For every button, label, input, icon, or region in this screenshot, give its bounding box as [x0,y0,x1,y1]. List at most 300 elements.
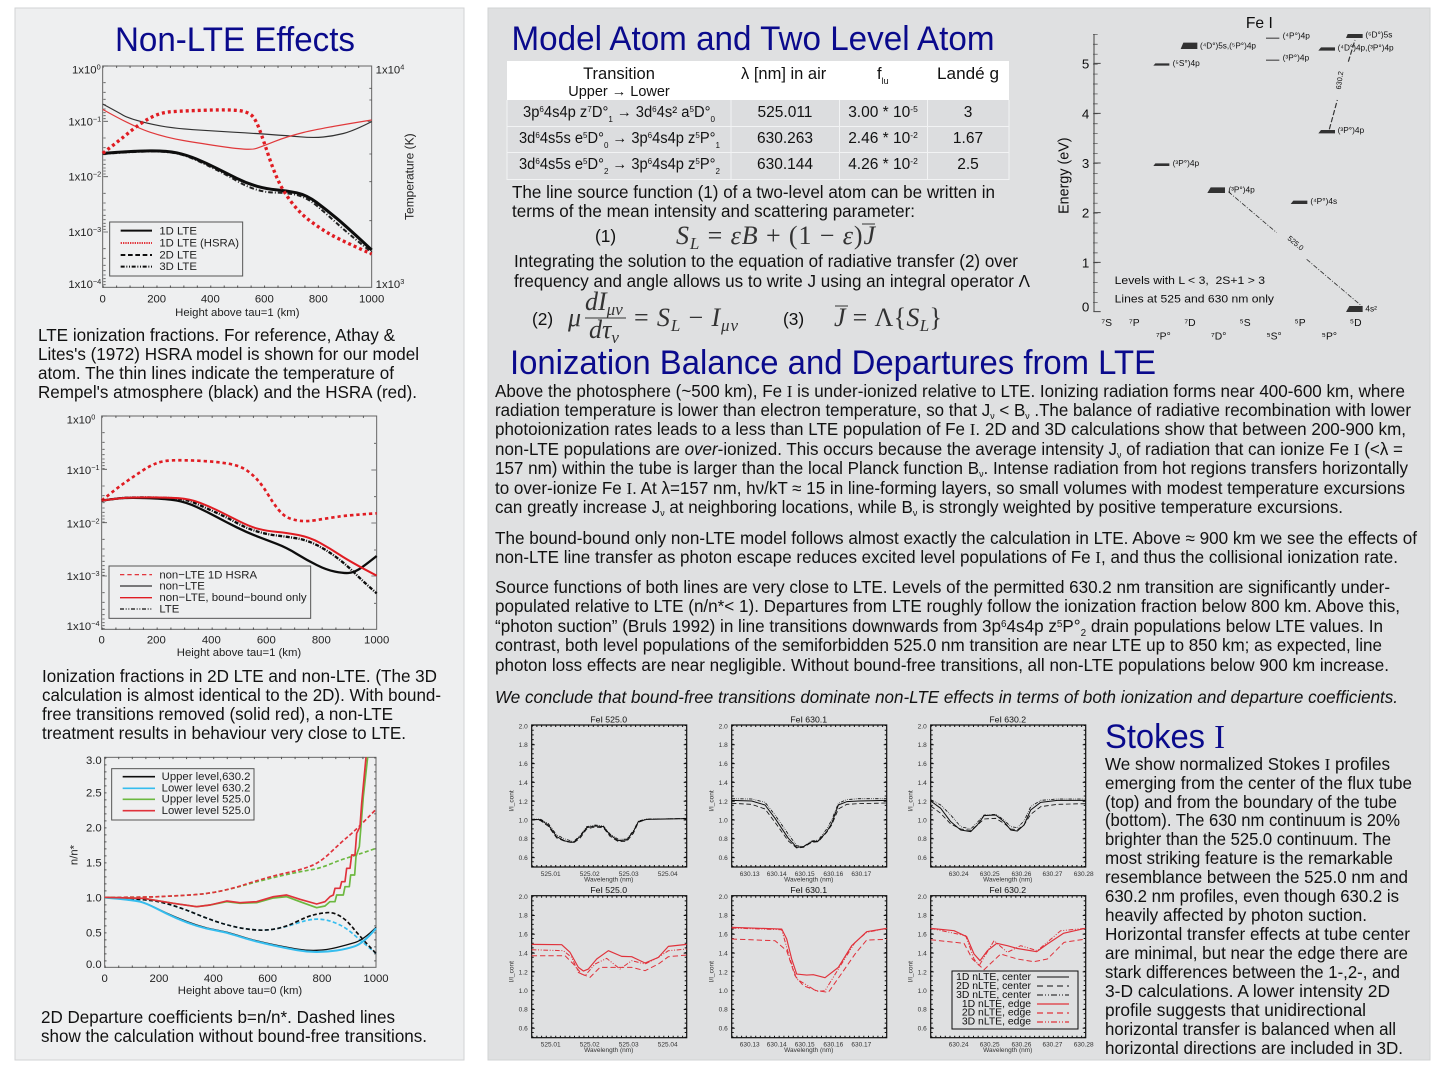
plot: Fe I 630.1 edge: 0.8 [719,1007,728,1014]
plot: Fe I 630.2 center: Wavelength (nm) [983,876,1032,884]
text: under-ionization paragraph: Above the photosphere (~500 km), Fe I is under-ionized relative to LTE. Ionizing radiation forms near 400-600 km, where [495,381,1405,401]
plot: Fe I 630.1 center: 630.16 [823,871,844,878]
plot: Fe I 630.1 edge: 1.4 [719,951,728,958]
text: bound-bound paragraph: non-LTE line transfer as photon escape reduces excited level populations of Fe I, and thus the collisional ionization rate. [495,547,1398,567]
y axis labels: −4 [91,619,100,628]
legend: Stokes line styles: 2D nLTE, center [956,981,1032,992]
plot: Fe I 525.0 edge: 1.2 [519,970,528,977]
panel: model atom, ionization balance and Stokes I [488,8,1430,1060]
y axis labels: 1.5 [86,858,102,870]
note: levels selection [1115,275,1274,305]
x axis labels: 400 [204,973,223,985]
x axis labels: 600 [257,635,276,647]
left axis labels: 0 [97,62,101,71]
x axis labels: 200 [147,294,166,306]
text: Stokes I description: are minimal, but near the edge there are [1105,943,1408,963]
x axis labels: 800 [309,294,328,306]
y axis labels: 3.0 [86,755,102,767]
caption: departure coefficients: 2D Departure coefficients b=n/n*. Dashed lines [41,1007,395,1027]
row 630.263: -2 [910,130,918,140]
text: bound-bound paragraph: The bound-bound only non-LTE model follows almost exactly the calculation in LTE. Above ≈ 900 km we see the effects of [495,528,1417,548]
plot: Fe I 525.0 center: I/I_cont [509,790,516,812]
right axis labels: 1x10 [376,64,400,76]
text: under-ionization paragraph: < B [995,400,1025,420]
plot: Fe I 630.1 edge: Wavelength (nm) [784,1047,833,1054]
row 525.011 [523,104,972,124]
heading: Ionization Balance: Ionization Balance and Departures from LTE [510,344,1156,382]
equation 3: (3) [783,309,804,329]
term labels: ⁵D [1350,318,1362,329]
equation 1: S [676,221,689,250]
plot: Fe I 630.1 center: 1.8 [719,742,728,749]
title: Non-LTE Effects: Non-LTE Effects [115,21,355,59]
level labels: 525.0 [1286,234,1306,252]
x axis labels: Height above tau=1 (km) [175,307,300,319]
plot: Fe I 630.2 edge: 1.8 [918,913,927,920]
y axis labels: 1x10 [67,518,91,530]
plot: Fe I 525.0 edge: 2.0 [519,894,528,901]
row 630.263: → 3p [608,130,648,147]
plot: Fe I 630.1 edge: 2.0 [719,894,728,901]
chart: LTE ionization fractions [68,62,416,319]
text: under-ionization paragraph: ν [990,411,995,421]
plot: Fe I 525.0 edge: 0.6 [519,1026,528,1033]
plot: Fe I 630.2 center: 0.8 [918,836,927,843]
y axis labels: 0 [91,412,95,421]
legend: Stokes line styles: 3D nLTE, center [956,990,1032,1001]
right axis labels: 4 [400,62,404,71]
plot: Fe I 525.0 edge: 525.03 [619,1042,639,1049]
axis labels: 1 [1082,255,1089,270]
plot: Fe I 525.0 edge: 525.02 [580,1042,600,1049]
row 630.263: 2.46 * 10 [848,130,910,147]
plot: Fe I 525.0 center: 1.2 [519,799,528,806]
plot: Fe I 630.2 edge: 1.6 [918,932,927,939]
text: under-ionization paragraph: is strongly weighted by positive temperature excursions. [917,497,1343,517]
plot: Fe I 525.0 center: 1.0 [519,818,528,824]
plot: Fe I 525.0 center: 1.4 [519,780,528,787]
x axis labels: 600 [255,294,274,306]
equation 2: ν [611,328,619,347]
caption: ionization fractions: calculation is almost identical to the 2D). With bound- [42,685,441,705]
plot: Fe I 525.0 center: 2.0 [519,724,528,730]
x axis labels: 800 [313,973,331,985]
plot: Fe I 630.2 center: 630.24 [949,871,969,878]
plot: Fe I 630.1 edge: 1.8 [719,913,728,920]
text: under-ionization paragraph: ν [660,508,665,518]
text: Stokes I description [1105,754,1412,1058]
plot: Fe I 630.1 edge: 630.17 [851,1042,872,1049]
plot: Fe I 630.2 center: 630.27 [1042,871,1063,878]
text: under-ionization paragraph: ν [1025,411,1030,421]
text: source functions paragraph: 5 [1057,619,1063,630]
plot: Fe I 630.2 edge: 2.0 [918,894,927,901]
plot: Fe I 630.1 center: I/I_cont [709,790,716,812]
legend: Lower level 630.2 [162,783,250,795]
level labels: (³P°)4p [1173,158,1200,168]
text: Stokes I description: horizontal transfer is balanced when all [1105,1019,1396,1039]
plot: Fe I 630.2 center: 1.8 [918,742,927,749]
x axis labels: 600 [258,973,277,985]
table header [568,65,999,100]
row 525.011: 7 [587,104,592,114]
row 525.011: 1 [608,114,613,124]
equation 3 [783,303,942,335]
charts: Stokes I profiles [509,714,1094,1054]
transition lines [1228,40,1362,306]
caption: LTE ionization fractions [38,325,419,402]
text: under-ionization paragraph: ν [979,469,984,479]
level labels: (⁴D°)4p,(³P°)4p [1338,43,1394,53]
row 630.263: 3d [519,130,536,147]
legend: 1D LTE [159,225,197,237]
plot: Fe I 630.1 center: 630.17 [851,871,872,878]
x axis labels: Height above tau=1 (km) [177,647,301,659]
plot: Fe I 630.1 center: 630.14 [767,871,787,878]
chart: Fe I energy level diagram: Fe I [1246,15,1273,32]
text: two-level source function: The line source function (1) of a two-level atom can be written in [512,182,995,202]
caption: ionization fractions: Ionization fractions in 2D LTE and non-LTE. (The 3D [42,666,437,686]
left axis labels: −3 [93,225,101,234]
row 630.144: D° [588,156,604,173]
equation 2: dτ [589,315,611,344]
text: under-ionization paragraph: of radiation that can ionize Fe [1121,439,1354,459]
term labels [1101,318,1362,342]
heading: Stokes I: Stokes I [1105,718,1225,756]
plot: Fe I 525.0 edge: FeI 525.0 [590,885,627,895]
plot: Fe I 630.2 edge [908,885,1094,1054]
row 630.144: 5 [583,156,588,166]
term labels: ⁷D° [1211,331,1226,342]
caption: ionization fractions [42,666,441,743]
y axis labels: 1x10 [67,414,91,426]
text: integrating the solution: frequency and angle allows us to write J using an integral operator Λ [514,271,1030,291]
plot: Fe I 630.1 edge: 1.6 [719,932,728,939]
axis labels: 0 [1082,300,1089,315]
plot: Fe I 525.0 center: 525.02 [580,871,600,878]
row 630.144: -2 [910,156,918,166]
y axis labels: 1x10 [67,465,91,477]
left axis labels: 1x10 [68,116,93,128]
text: source functions paragraph: populated relative to LTE (n/n*< 1). Departures from LTE roughly follow the ionization fraction below 800 km. Above this, [495,596,1400,616]
plot: Fe I 630.2 edge: 1.4 [918,951,927,958]
axis labels [1057,56,1090,315]
equation 2: μ [567,303,581,332]
plot: Fe I 630.2 edge: FeI 630.2 [989,885,1026,895]
plot: Fe I 630.1 center: 1.6 [719,761,728,768]
x axis labels: 1000 [359,294,384,306]
level labels: (⁶D°)5s [1365,30,1392,40]
row 630.263: 6 [648,130,652,140]
axis labels: 3 [1082,156,1089,171]
x axis labels [100,294,384,319]
plot: Fe I 630.1 center [709,714,887,884]
plot: Fe I 525.0 edge: 1.8 [519,913,528,920]
row 630.263: 5 [583,130,588,140]
left axis labels: −1 [93,114,101,123]
legend: 3D LTE [159,261,197,273]
axis labels: 5 [1082,56,1089,71]
row 630.144 [519,156,979,176]
text: under-ionization paragraph [495,381,1411,518]
plot: Fe I 630.1 edge: 630.14 [767,1042,787,1049]
right axis labels: 1x10 [376,279,400,291]
x axis labels: Height above tau=0 (km) [178,985,302,997]
row 525.011: 525.011 [758,104,812,121]
legend: 2D LTE [159,249,197,261]
row 525.011: -5 [910,104,918,114]
plot: Fe I 630.1 center: FeI 630.1 [790,714,827,724]
row 630.144: 3d [519,156,536,173]
left axis labels: −2 [93,170,101,179]
text: Stokes I description: We show normalized Stokes I profiles [1105,754,1390,774]
plot: Fe I 630.1 edge: 630.15 [795,1042,815,1049]
plot: Fe I 630.2 edge: 1.0 [918,988,927,995]
level labels: (³P°)4p [1283,52,1310,62]
level labels: 4s² [1365,303,1377,313]
note: levels selection: Levels with L < 3, 2S+1 > 3 [1115,275,1265,287]
row 630.144: 6 [648,156,652,166]
y axis labels: 0.0 [86,959,102,971]
equation 2 [532,287,738,347]
y axis labels: 0.5 [86,928,102,940]
text: Stokes I description: profile suggests that unidirectional [1105,1000,1366,1020]
text: under-ionization paragraph: ν [1117,450,1122,460]
text: Stokes I description: horizontal directions are included in 3D. [1105,1038,1403,1058]
level labels [1173,30,1394,313]
plot: Fe I 630.2 center: 1.4 [918,780,927,787]
text: source functions paragraph: Source functions of both lines are very close to LTE. Levels of the permitted 630.2 nm transition are significantly under- [495,577,1390,597]
row 630.144: 2 [604,166,609,176]
term labels: ⁷S [1101,318,1112,329]
plot: Fe I 630.2 edge: Wavelength (nm) [983,1047,1032,1054]
table header: Upper → Lower [568,84,670,100]
left axis labels: −4 [93,277,101,286]
plot: Fe I 630.2 center: 0.6 [918,855,927,862]
plot: Fe I 630.2 edge: 0.6 [918,1026,927,1033]
plot: Fe I 630.1 edge: 1.0 [719,988,728,995]
equation 3: L [919,316,929,335]
axis labels: Energy (eV) [1057,137,1073,214]
equation 1: εB + (1 − ε)J [731,221,875,250]
text: under-ionization paragraph: ν [913,508,918,518]
text: source functions paragraph: 2 [1081,628,1087,639]
heading: Model Atom and Two Level Atom: Model Atom and Two Level Atom [512,20,994,58]
caption: ionization fractions: treatment results in behaviour very close to LTE. [42,723,406,743]
plot: Fe I 630.2 edge: 630.27 [1042,1042,1063,1049]
legend [112,769,254,820]
equation 1 [595,221,876,253]
text: under-ionization paragraph: . Intense radiation from hot regions transfers horizontally [984,458,1408,478]
row 630.263: 4s5s e [540,130,583,147]
right axis labels [376,62,416,291]
plot: Fe I 630.2 center: 2.0 [918,724,927,730]
plot: Fe I 630.1 center: 2.0 [719,724,728,730]
level labels: (³P°)4p [1228,185,1255,195]
text: source functions paragraph: drain populations below LTE values. In [1086,616,1383,636]
level labels: (⁴P°)4s [1310,196,1337,206]
row 525.011: D° [694,104,710,121]
plot: Fe I 630.1 center: Wavelength (nm) [784,876,833,884]
row 525.011: 3 [964,104,972,121]
y axis labels: 1.0 [86,893,102,905]
chart: Fe I energy level diagram [1057,15,1394,342]
term labels: ⁵P [1294,318,1306,329]
equation 1: (1) [595,226,616,246]
energy levels [1153,34,1363,312]
plot: Fe I 525.0 edge: 525.01 [541,1042,561,1049]
text: under-ionization paragraph: at neighboring locations, while B [665,497,913,517]
equation 1: = [700,221,730,250]
term labels: ⁵P° [1322,331,1337,342]
row 630.144: 4.26 * 10 [848,156,910,173]
text: Stokes I description: 3-D calculations. A lower intensity 2D [1105,981,1390,1001]
x axis labels: 400 [201,294,220,306]
legend: non−LTE, bound−bound only [159,592,307,604]
text: bound-bound paragraph [495,528,1417,567]
plot: Fe I 525.0 center: 0.6 [519,855,528,862]
note: levels selection: Lines at 525 and 630 nm only [1115,293,1274,305]
equation 2: − [681,303,711,332]
plot: Fe I 630.2 edge: 1.2 [918,970,927,977]
plot: Fe I 525.0 center: 1.8 [519,742,528,749]
plot: Fe I 525.0 edge: Wavelength (nm) [584,1047,633,1054]
text: under-ionization paragraph: radiation temperature is lower than electron temperature, so that J [495,400,1000,420]
plot: Fe I 630.2 center: 1.0 [918,818,927,824]
chart: ionization fractions 2D LTE and non-LTE [67,412,389,659]
equation 2: I [711,303,720,332]
text: two-level source function: terms of the mean intensity and scattering parameter: [512,201,915,221]
row 525.011: 0 [710,114,715,124]
equation 2: L [670,316,680,335]
caption: ionization fractions: free transitions removed (solid red), a non-LTE [42,704,393,724]
legend: Stokes line styles: 3D nLTE, edge [962,1016,1031,1028]
plot: Fe I 525.0 center: 525.04 [658,871,678,878]
x axis labels [99,635,389,659]
x axis labels: 0 [99,635,105,647]
text: Stokes I description: stark differences between the 1-,2-, and [1105,962,1400,982]
text: Stokes I description: most striking feature is the remarkable [1105,848,1393,868]
plot: Fe I 525.0 edge: 1.4 [519,951,528,958]
row 525.011: 5 [689,104,694,114]
text: Stokes I description: (top) and from the boundary of the tube [1105,792,1397,812]
text: under-ionization paragraph: 157 nm) within the tube is larger than the local Planck function B [495,458,987,478]
y axis labels [68,755,102,971]
plot: Fe I 630.1 edge: 1.2 [719,970,728,977]
row 630.144: 5 [695,156,700,166]
plot: Fe I 630.2 center: I/I_cont [908,790,915,812]
y axis labels: 2.5 [86,788,102,800]
legend: Stokes line styles: 1D nLTE, edge [962,999,1031,1010]
plot: Fe I 630.1 center: 1.2 [719,799,728,806]
table header: λ [nm] in air [741,65,827,83]
text: under-ionization paragraph: I (<λ = [1354,439,1404,459]
term labels: ⁵S° [1266,331,1282,342]
text: Stokes I description: 630.2 nm profiles, even though 630.2 is [1105,886,1399,906]
caption: LTE ionization fractions: Lites's (1972) HSRA model is shown for our model [38,344,419,364]
plot: Fe I 525.0 center: 0.8 [519,836,528,843]
legend [110,222,243,276]
plot: Fe I 630.1 edge [709,885,887,1054]
equation 2: μν [720,316,738,335]
x axis labels: 800 [312,635,331,647]
term labels: ⁷D [1184,318,1196,329]
row 630.263: 5 [695,130,700,140]
y axis labels: 2.0 [86,823,102,835]
text: under-ionization paragraph: .The balance of radiative recombination with lower [1030,400,1411,420]
legend: 1D LTE (HSRA) [159,237,239,249]
text: Stokes I description: brighter than the 525.0 continuum. The [1105,829,1391,849]
text: Stokes I description: resemblance between the 525.0 nm and [1105,867,1408,887]
term labels: ⁵S [1239,318,1251,329]
text: Stokes I description: emerging from the center of the flux tube [1105,773,1412,793]
right axis labels: Temperature (K) [402,133,416,220]
row 630.263: 1.67 [953,130,983,147]
row 525.011: 3.00 * 10 [848,104,910,121]
plot: Fe I 525.0 edge: 525.04 [658,1042,678,1049]
y axis labels: n/n* [68,844,80,865]
y axis labels: −3 [91,569,100,578]
row 525.011: 4s² a [657,104,690,121]
text: two-level source function [512,182,995,221]
plot: Fe I 630.2 edge: 0.8 [918,1007,927,1014]
plot: Fe I 525.0 center: Wavelength (nm) [584,876,633,884]
table header: lu [882,76,889,86]
level labels: (⁴D°)5s,(⁵P°)4p [1200,41,1256,51]
plot: Fe I 630.1 center: 1.4 [719,780,728,787]
caption: departure coefficients [41,1007,427,1046]
plot: Fe I 525.0 edge: 1.6 [519,932,528,939]
row 525.011: → 3d [613,104,652,121]
plot: Fe I 525.0 center: 1.6 [519,761,528,768]
x axis labels: 0 [102,973,108,985]
equation 2: dI [585,287,607,316]
level labels: (⁴P°)4p [1283,30,1310,40]
y axis labels: 1x10 [67,621,91,633]
plot: Fe I 630.2 edge: 630.24 [949,1042,969,1049]
plot: Fe I 630.2 center: 1.2 [918,799,927,806]
plot: Fe I 525.0 center: FeI 525.0 [590,714,627,724]
table header: Transition [583,65,655,83]
axis labels: 2 [1082,206,1089,221]
left axis labels: 1x10 [68,172,93,184]
plot: Fe I 630.1 edge: 630.16 [823,1042,844,1049]
legend: non−LTE [159,580,205,592]
text: under-ionization paragraph: can greatly increase J [495,497,663,517]
row 630.144: 4s5s e [540,156,583,173]
text: integrating the solution: Integrating the solution to the equation of radiative transfer (2) over [514,251,1018,271]
row 630.263: D° [588,130,604,147]
plot: Fe I 630.2 center: 1.6 [918,761,927,768]
panel: Non-LTE effects [15,8,464,1060]
plot: Fe I 525.0 center: 525.03 [619,871,639,878]
legend: Upper level 525.0 [162,794,250,806]
plot: Fe I 630.2 center: 630.28 [1074,871,1094,878]
x axis labels: 200 [150,973,168,985]
plot: Fe I 525.0 edge [509,885,687,1054]
equation 1: L [689,234,699,253]
x axis labels: 400 [202,635,221,647]
row 630.144: 2.5 [957,156,979,173]
legend: Stokes line styles [952,971,1078,1029]
row 525.011: 3p [523,104,540,121]
x axis labels: 200 [147,635,166,647]
x axis labels: 1000 [363,973,389,985]
text: source functions paragraph: photon loss effects are near negligible. Without bound-free transitions, all non-LTE populations below 900 km increase. [495,655,1389,675]
text: Stokes I description: (bottom). The 630 nm continuum is 20% [1105,810,1400,830]
row 630.263: 6 [535,130,540,140]
level labels: (⁵S°)4p [1173,58,1200,68]
